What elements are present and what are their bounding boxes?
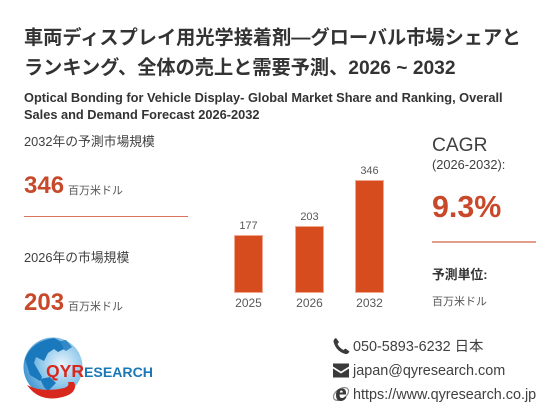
- logo wordmark suffix: ESEARCH: [84, 365, 153, 380]
- axis label: 2026: 2026: [296, 296, 323, 310]
- bar: 2025: [234, 235, 263, 293]
- value label: 203: 203: [300, 211, 319, 223]
- divider: left: [24, 216, 188, 217]
- icon: globe: [24, 338, 82, 398]
- icon: phone: [334, 338, 350, 354]
- label: 2032 forecast market size: 2032年の予測市場規模: [24, 134, 155, 149]
- icon: internet browser: [332, 387, 350, 401]
- axis label: 2025: 2025: [235, 296, 262, 310]
- value label: 346: 346: [360, 165, 379, 177]
- forecast unit label: 予測単位:: [432, 267, 487, 282]
- logo wordmark: QYR: [46, 361, 84, 381]
- bar: 2026: [295, 226, 324, 293]
- title: ランキング、全体の売上と需要予測、2026 ~ 2032: [24, 58, 456, 79]
- CAGR value: 9.3%: [432, 190, 501, 224]
- CAGR heading: CAGR: [432, 135, 487, 156]
- label: 2026 market size: 2026年の市場規模: [24, 250, 129, 265]
- title: [24, 27, 521, 79]
- bar: 2032: [355, 180, 384, 293]
- value: 203 million USD: 203 百万米ドル: [24, 289, 123, 316]
- divider: right: [432, 241, 536, 243]
- subtitle: Optical Bonding for Vehicle Display- Global Market Share and Ranking, Overall: [24, 90, 503, 105]
- subtitle: [24, 90, 503, 122]
- axis label: 2032: 2032: [356, 296, 383, 310]
- email address: japan@qyresearch.com: [353, 363, 505, 379]
- contact: website: [332, 387, 536, 403]
- value: 346 million USD: 346 百万米ドル: [24, 172, 123, 199]
- title: 車両ディスプレイ用光学接着剤—グローバル市場シェアと: [24, 28, 521, 49]
- forecast unit value: 百万米ドル: [432, 296, 487, 308]
- subtitle: Sales and Demand Forecast 2026-2032: [24, 107, 259, 122]
- logo: QYResearch: [24, 338, 153, 398]
- website url: https://www.qyresearch.co.jp: [353, 387, 536, 403]
- contact: phone: [334, 338, 483, 355]
- phone number: 050-5893-6232 日本: [353, 339, 483, 355]
- CAGR period: (2026-2032):: [432, 157, 505, 172]
- contact: email: [333, 363, 505, 379]
- bar chart: [234, 165, 384, 310]
- icon: envelope: [333, 364, 349, 378]
- value label: 177: 177: [239, 220, 258, 232]
